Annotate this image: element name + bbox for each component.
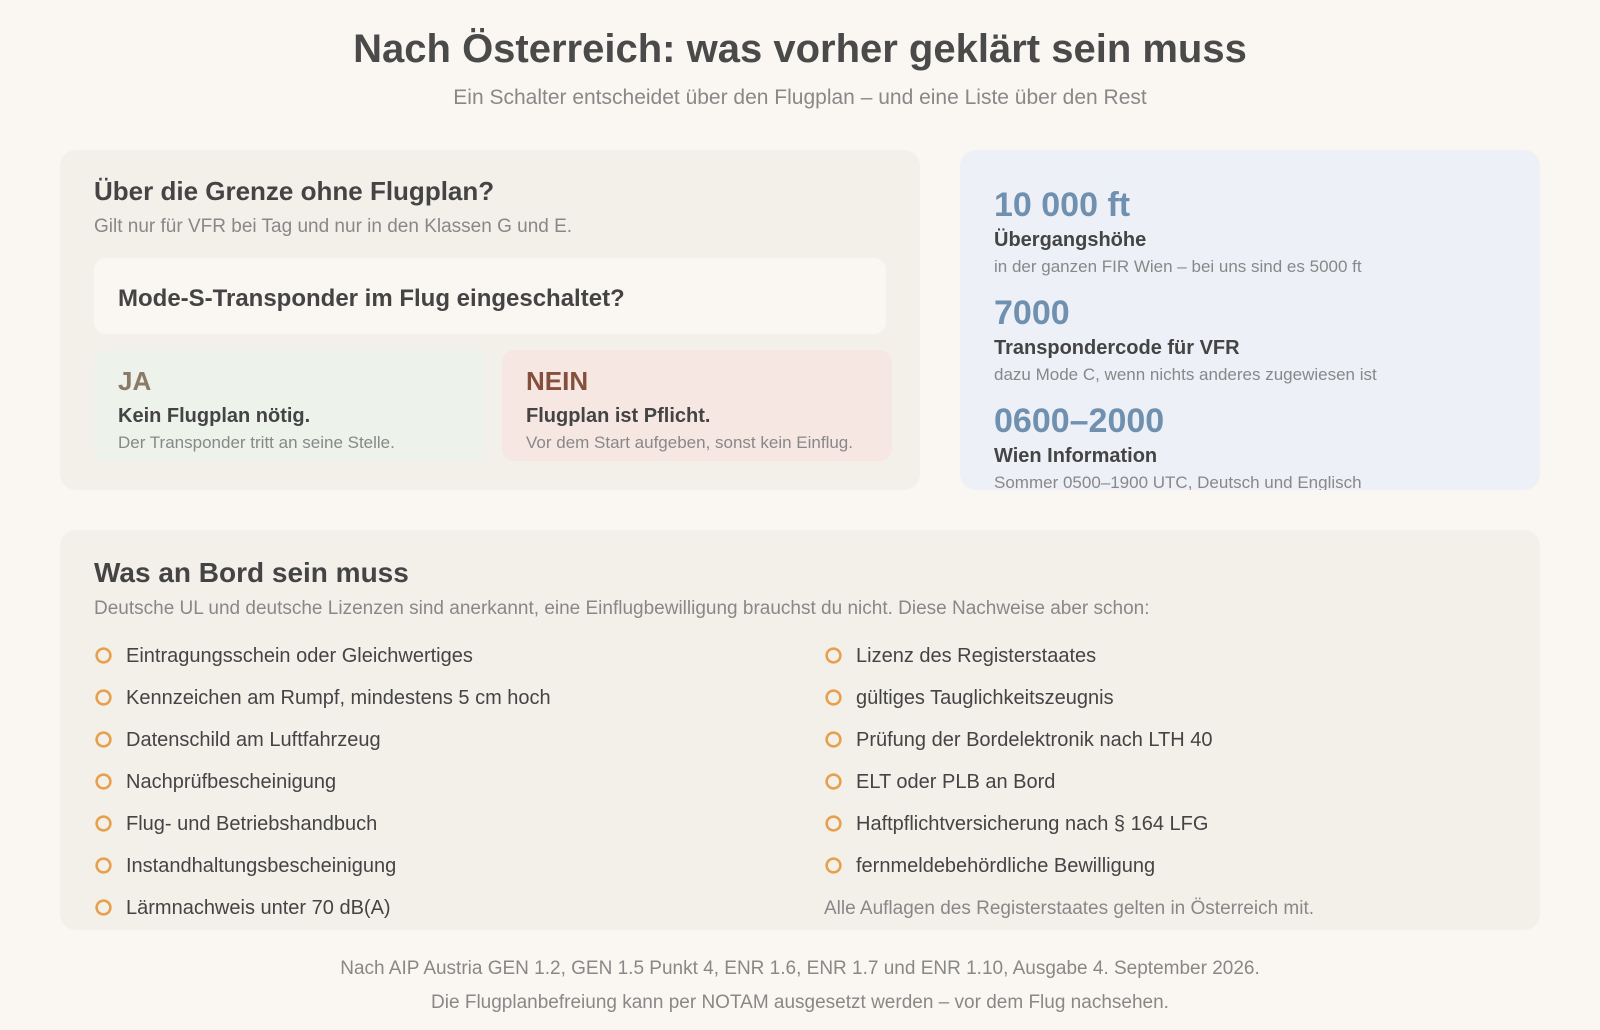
- checklist: right column: [824, 645, 1314, 919]
- figure: transition altitude: [994, 186, 1362, 276]
- item: Eintragungsschein oder Gleichwertiges: [126, 645, 473, 667]
- note: dazu Mode C, wenn nichts anderes zugewiesen ist: [994, 365, 1377, 384]
- value 0600–2000: 0600–2000: [994, 402, 1164, 440]
- answer: JA: [94, 350, 484, 461]
- value 7000: 7000: [994, 294, 1070, 332]
- label NEIN: NEIN: [526, 366, 588, 396]
- panel description: Gilt nur für VFR bei Tag und nur in den Klassen G und E.: [94, 216, 572, 237]
- JA explanation: Der Transponder tritt an seine Stelle.: [118, 433, 395, 452]
- note: in der ganzen FIR Wien – bei uns sind es 5000 ft: [994, 257, 1362, 276]
- closing note: Alle Auflagen des Registerstaates gelten in Österreich mit.: [824, 898, 1314, 919]
- item: Instandhaltungsbescheinigung: [126, 855, 396, 877]
- label: Transpondercode für VFR: [994, 337, 1240, 359]
- item: Nachprüfbescheinigung: [126, 771, 336, 793]
- item: Lärmnachweis unter 70 dB(A): [126, 897, 391, 919]
- panel: border decision: [60, 150, 920, 490]
- panel: key figures: [960, 150, 1540, 490]
- footer source line: Nach AIP Austria GEN 1.2, GEN 1.5 Punkt 4, ENR 1.6, ENR 1.7 und ENR 1.10, Ausgabe 4. September 2026.: [340, 958, 1260, 979]
- item: Prüfung der Bordelektronik nach LTH 40: [856, 729, 1212, 751]
- item: Flug- und Betriebshandbuch: [126, 813, 377, 835]
- footer note line: Die Flugplanbefreiung kann per NOTAM ausgesetzt werden – vor dem Flug nachsehen.: [431, 992, 1169, 1013]
- figure: Wien Information hours: [994, 402, 1362, 490]
- item: Datenschild am Luftfahrzeug: [126, 729, 381, 751]
- item: Kennzeichen am Rumpf, mindestens 5 cm hoch: [126, 687, 551, 709]
- value 10 000 ft: 10 000 ft: [994, 186, 1130, 224]
- item: Haftpflichtversicherung nach § 164 LFG: [856, 813, 1208, 835]
- subtitle: Ein Schalter entscheidet über den Flugplan – und eine Liste über den Rest: [453, 86, 1147, 109]
- item: Lizenz des Registerstaates: [856, 645, 1096, 667]
- label: Wien Information: [994, 445, 1157, 467]
- JA result: Kein Flugplan nötig.: [118, 405, 310, 427]
- checklist: left column: [95, 645, 551, 919]
- item: ELT oder PLB an Bord: [856, 771, 1055, 793]
- title: Nach Österreich: was vorher geklärt sein muss: [353, 27, 1247, 71]
- panel: on-board documents: [60, 530, 1540, 930]
- NEIN explanation: Vor dem Start aufgeben, sonst kein Einflug.: [526, 433, 853, 452]
- label JA: JA: [118, 366, 151, 396]
- question box: [94, 258, 886, 334]
- heading: an Bord: Was an Bord sein muss: [94, 557, 409, 588]
- label: Übergangshöhe: [994, 229, 1146, 251]
- heading: ohne Flugplan: Über die Grenze ohne Flugplan?: [94, 176, 494, 206]
- figure: transponder code: [994, 294, 1377, 384]
- item: gültiges Tauglichkeitszeugnis: [856, 687, 1114, 709]
- NEIN result: Flugplan ist Pflicht.: [526, 405, 710, 427]
- panel description: Deutsche UL und deutsche Lizenzen sind anerkannt, eine Einflugbewilligung brauchst du nicht. Diese Nachweise aber schon:: [94, 598, 1150, 619]
- answer: NEIN: [502, 350, 892, 461]
- item: fernmeldebehördliche Bewilligung: [856, 855, 1155, 877]
- question text: Mode-S-Transponder im Flug eingeschaltet?: [118, 285, 625, 312]
